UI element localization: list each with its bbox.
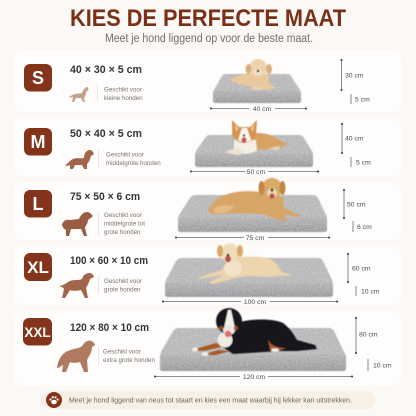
badge M xyxy=(24,128,52,156)
dog: corgi xyxy=(225,120,288,155)
subtitle: Meet je hond liggend op voor de beste maat. xyxy=(105,33,313,45)
bed XXL xyxy=(160,328,346,371)
suitability S: Geschikt voor xyxy=(104,86,142,94)
suitability XL: grote honden xyxy=(104,286,141,294)
badge M: M xyxy=(30,132,46,152)
height dimension M xyxy=(342,124,371,167)
badge XL: XL xyxy=(27,258,49,277)
width dimension XL: 100 cm xyxy=(244,299,266,306)
suitability S: kleine honden xyxy=(104,95,143,102)
bed M xyxy=(195,135,313,167)
size text L: 75 × 50 × 6 cm xyxy=(70,191,140,203)
size text XXL: 120 × 80 × 10 cm xyxy=(70,322,149,334)
suitability M: Geschikt voor xyxy=(106,152,144,158)
panel: size XXL xyxy=(14,308,401,386)
height dimension XXL: 80 cm xyxy=(359,332,378,338)
icon: dachshund xyxy=(65,150,94,169)
badge XXL xyxy=(23,318,52,346)
icon: large dog xyxy=(59,273,94,298)
badge XL xyxy=(24,253,52,281)
panel: size M xyxy=(14,117,401,176)
dog: bernese mountain dog xyxy=(192,308,317,356)
dog: golden retriever xyxy=(208,178,302,221)
width dimension L: 75 cm xyxy=(246,235,265,242)
suitability L: grote honden xyxy=(104,229,141,236)
height dimension XL: 10 cm xyxy=(361,288,380,296)
height dimension M: 5 cm xyxy=(356,160,371,166)
height dimension XXL: 10 cm xyxy=(373,362,392,370)
dog: labrador xyxy=(198,244,294,284)
badge XXL: XXL xyxy=(24,325,51,340)
suitability XL: Geschikt voor xyxy=(104,278,142,285)
icon: medium-large dog xyxy=(62,212,93,236)
suitability L: middelgrote tot xyxy=(104,220,145,228)
badge L: L xyxy=(32,194,44,214)
bed S xyxy=(213,74,301,103)
height dimension M: 40 cm xyxy=(345,136,364,142)
suitability L: Geschikt voor xyxy=(104,212,142,219)
badge S xyxy=(24,64,52,92)
icon: paw xyxy=(46,392,62,408)
panel: size L xyxy=(14,178,401,242)
height dimension L: 6 cm xyxy=(357,224,372,231)
suitability M: middelgrote honden xyxy=(106,160,161,167)
height dimension S: 5 cm xyxy=(355,96,370,104)
size text M: 50 × 40 × 5 cm xyxy=(70,128,142,140)
suitability XXL: extra grote honden xyxy=(103,357,156,364)
dog: poodle xyxy=(230,59,276,90)
height dimension S xyxy=(342,60,370,104)
height dimension XL: 60 cm xyxy=(352,266,371,272)
tip text: Meet je hond liggend van neus tot staart en kies een maat waarbij hij lekker kan uitstrekken. xyxy=(69,396,352,404)
bed XL xyxy=(165,258,333,297)
bed L xyxy=(178,195,327,232)
panel: size S xyxy=(14,50,401,113)
width dimension S xyxy=(211,106,306,113)
size text S: 40 × 30 × 5 cm xyxy=(70,64,142,76)
width dimension M xyxy=(191,169,318,176)
badge L xyxy=(24,190,52,218)
width dimension XXL: 120 cm xyxy=(243,374,265,381)
title: KIES DE PERFECTE MAAT xyxy=(70,5,346,32)
width dimension S: 40 cm xyxy=(253,106,272,113)
height dimension XL xyxy=(348,254,380,296)
height dimension L: 50 cm xyxy=(347,202,366,208)
icon: extra large dog xyxy=(57,341,95,372)
footer tip xyxy=(40,391,375,410)
icon: small dog xyxy=(69,87,88,102)
height dimension XXL xyxy=(356,318,392,371)
height dimension S: 30 cm xyxy=(345,72,364,80)
width dimension M: 50 cm xyxy=(247,169,266,176)
height dimension L xyxy=(344,190,372,232)
suitability XXL: Geschikt voor xyxy=(103,348,141,356)
size text XL: 100 × 60 × 10 cm xyxy=(70,255,148,267)
badge S: S xyxy=(32,68,44,88)
panel: size XL xyxy=(14,244,401,306)
